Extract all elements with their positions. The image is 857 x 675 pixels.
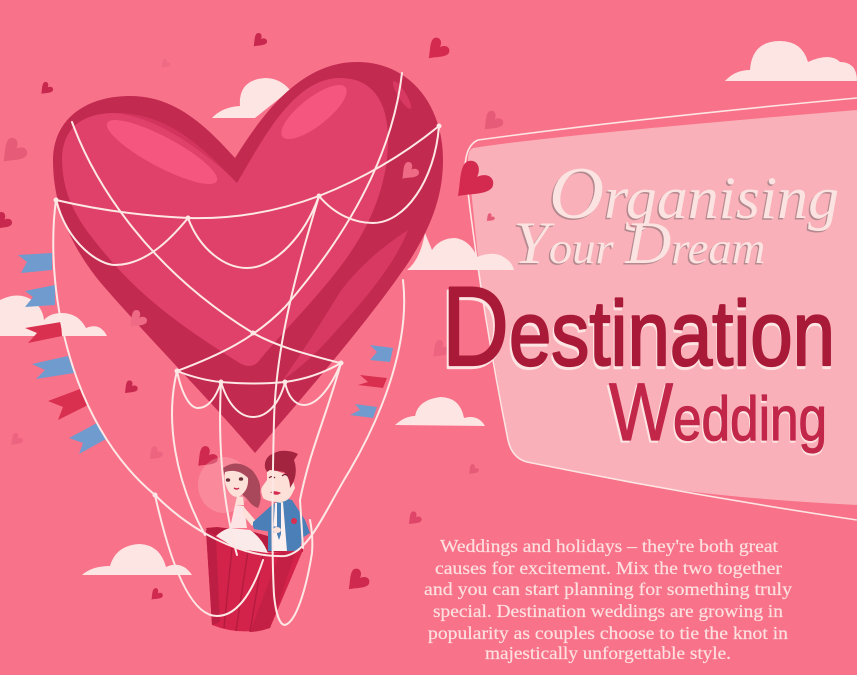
title: Wedding: Wedding	[607, 369, 827, 460]
couple	[198, 451, 310, 553]
veil	[198, 457, 250, 513]
balloon ropes	[53, 73, 442, 625]
basket back	[206, 527, 303, 552]
small floating hearts	[0, 32, 505, 604]
intro text block: majestically unforgettable style.	[485, 643, 731, 663]
cloud over panel	[407, 233, 514, 270]
groom	[253, 451, 310, 551]
title: Organising Your Dream: Your Dream	[514, 210, 766, 276]
bunting flags left	[18, 253, 106, 454]
title: Organising Your Dream	[512, 153, 839, 278]
title: Organising Your Dream: Organising	[549, 153, 839, 235]
intro text block: and you can start planning for something truly	[424, 579, 792, 599]
basket	[206, 530, 303, 632]
title: Organising Your Dream: Your Dream	[512, 212, 764, 278]
heart balloon	[53, 62, 443, 453]
intro text block: popularity as couples choose to tie the knot in	[428, 623, 788, 643]
panel: title card	[465, 98, 857, 520]
intro text block: Weddings and holidays – they're both great	[440, 536, 778, 556]
intro text block: special. Destination weddings are growing in	[433, 601, 783, 621]
bride	[215, 463, 268, 553]
clouds behind the balloon	[0, 41, 857, 575]
title: Wedding: Wedding	[609, 367, 827, 458]
intro text block: causes for excitement. Mix the two together	[435, 558, 782, 578]
intro text block	[424, 536, 792, 663]
title: Organising Your Dream: Organising	[548, 154, 838, 236]
bunting flags right	[350, 345, 393, 418]
